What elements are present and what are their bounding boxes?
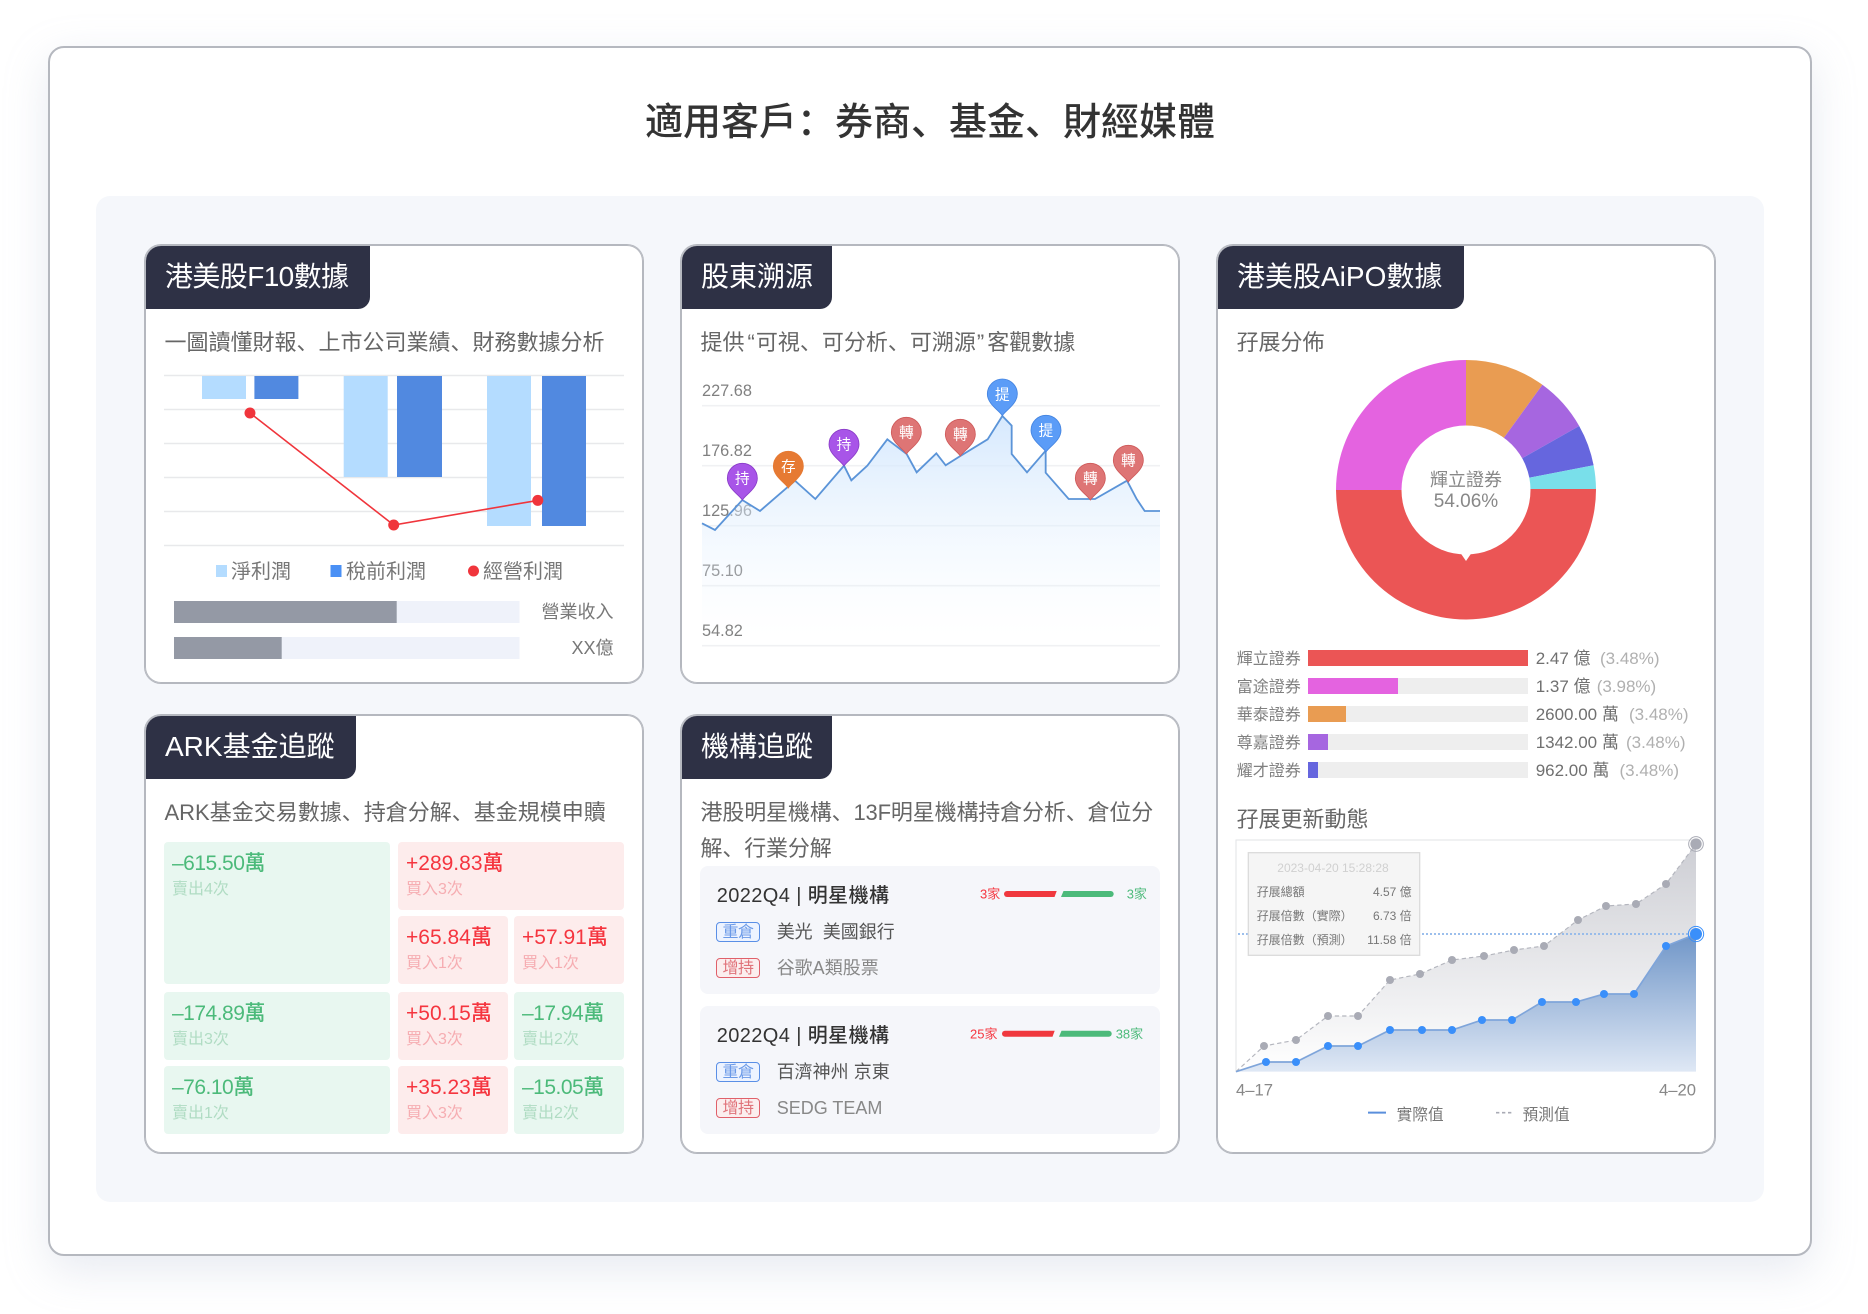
axis labels: 227.68 xyxy=(702,382,752,400)
heading tab xyxy=(146,246,370,309)
cell: 買入3次 xyxy=(406,1031,463,1048)
event pins: 持 xyxy=(735,471,750,488)
event pins: 轉 xyxy=(899,425,914,442)
buy and sell ratio: 3家 xyxy=(1127,886,1147,902)
event pins: 提 xyxy=(1039,423,1054,440)
ranked broker bars: 2.47 億 xyxy=(1536,649,1591,668)
title: 適用客戶：券商、基金、財經媒體 xyxy=(645,102,1215,144)
tag: increase xyxy=(716,1098,760,1118)
cell: 賣出3次 xyxy=(172,1031,229,1048)
event pins: 轉 xyxy=(1083,471,1098,488)
axis labels xyxy=(1236,1081,1696,1100)
heading tab xyxy=(146,716,356,779)
event pins: 存 xyxy=(781,459,796,476)
price line xyxy=(702,416,1160,530)
holdings: 美光 美國銀行 xyxy=(777,922,895,942)
legend: 稅前利潤 xyxy=(346,560,426,583)
background panel xyxy=(96,196,1764,1202)
axis labels xyxy=(702,382,752,640)
ranked broker bars: 962.00 萬 xyxy=(1536,761,1609,780)
heading tab: 股東溯源 xyxy=(701,261,813,292)
axis labels: 176.82 xyxy=(702,442,752,460)
cell: –174.89萬 xyxy=(172,1002,265,1025)
buy and sell ratio: 38家 xyxy=(1116,1026,1143,1042)
tag: increase: 增持 xyxy=(722,1100,754,1117)
cell: –76.10萬 xyxy=(172,1076,254,1099)
ranked broker bars: 尊嘉證券 xyxy=(1237,734,1301,752)
forecast line xyxy=(1236,837,1703,1072)
institution card 1 xyxy=(700,866,1160,994)
cell: +289.83萬 xyxy=(406,852,504,875)
bar and line chart xyxy=(164,374,624,659)
area chart xyxy=(1236,836,1704,1124)
event pins: 轉 xyxy=(953,427,968,444)
tooltip: 11.58 倍 xyxy=(1367,932,1412,947)
forecast area xyxy=(1236,844,1696,1072)
axis labels: 125.96 xyxy=(702,502,752,520)
revenue progress bars xyxy=(174,601,614,659)
ranked broker bars: (3.48%) xyxy=(1629,705,1689,724)
treemap xyxy=(164,842,624,1134)
heading tab: ARK基金追蹤 xyxy=(165,731,335,762)
legend: 經營利潤 xyxy=(483,560,563,583)
donut centre label: 輝立證券 xyxy=(1430,470,1502,490)
buy and sell ratio xyxy=(970,1026,1143,1042)
revenue progress bars: 營業收入 xyxy=(542,602,614,622)
buy and sell ratio: 25家 xyxy=(970,1026,997,1042)
legend xyxy=(216,560,563,583)
cell: +65.84萬 xyxy=(406,926,492,949)
cell: –615.50萬 xyxy=(172,852,265,875)
description: ARK基金交易數據、持倉分解、基金規模申贖 xyxy=(164,800,606,825)
heading tab: 機構追蹤 xyxy=(701,731,813,762)
event pins xyxy=(727,379,1143,500)
heading tab xyxy=(682,716,832,779)
cell: 賣出2次 xyxy=(522,1031,579,1048)
tooltip: 4.57 億 xyxy=(1373,885,1412,899)
cell: 賣出4次 xyxy=(172,881,229,898)
line chart with event pins xyxy=(702,378,1160,646)
ranked broker bars: 耀才證券 xyxy=(1237,762,1301,780)
actual line xyxy=(1236,926,1704,1072)
ranked broker bars: 輝立證券 xyxy=(1237,650,1301,668)
cell xyxy=(398,992,508,1060)
tooltip: 6.73 倍 xyxy=(1373,908,1412,923)
net profit bars xyxy=(202,376,531,526)
event pins: 提 xyxy=(995,386,1010,403)
panel: 港美股AiPO數據 xyxy=(1217,245,1715,1153)
panel: 機構追蹤 xyxy=(681,715,1179,1153)
panel: 港美股F10數據 xyxy=(145,245,643,683)
tooltip: 孖展倍數（預測） xyxy=(1257,932,1353,947)
price area xyxy=(702,416,1160,647)
cell: 賣出1次 xyxy=(172,1105,229,1122)
cell xyxy=(514,1066,624,1134)
heading tab: 港美股AiPO數據 xyxy=(1237,261,1442,292)
actual area xyxy=(1236,934,1696,1072)
tooltip: 孖展倍數（實際） xyxy=(1257,908,1353,923)
buy and sell ratio: 3家 xyxy=(980,886,1000,902)
heading tab xyxy=(682,246,832,309)
axis labels: 54.82 xyxy=(702,622,743,640)
card title: 2022Q4 | 明星機構 xyxy=(717,885,889,907)
cell xyxy=(398,1066,508,1134)
cell: +57.91萬 xyxy=(522,926,608,949)
tooltip: 孖展總額 xyxy=(1257,884,1305,899)
ranked broker bars: 1342.00 萬 xyxy=(1536,733,1619,752)
ranked broker bars: (3.98%) xyxy=(1597,677,1656,696)
crosshair xyxy=(1238,932,1696,936)
chart legend xyxy=(1368,1105,1570,1124)
cell xyxy=(398,842,624,910)
chart legend: 實際值 xyxy=(1397,1105,1444,1124)
holdings: 百濟神州 京東 xyxy=(777,1062,890,1082)
cell xyxy=(164,992,390,1060)
operating profit line xyxy=(244,408,543,530)
description: 一圖讀懂財報、上市公司業績、財務數據分析 xyxy=(164,330,605,355)
heading tab xyxy=(1218,246,1464,309)
ranked broker bars: (3.48%) xyxy=(1600,649,1660,668)
cell xyxy=(164,1066,390,1134)
cell xyxy=(514,916,624,984)
cell xyxy=(398,916,508,984)
cell: +35.23萬 xyxy=(406,1076,492,1099)
axis labels: 75.10 xyxy=(702,562,743,580)
cell: 買入3次 xyxy=(406,881,463,898)
panel: 股東溯源 xyxy=(681,245,1179,683)
heading tab: 港美股F10數據 xyxy=(165,261,348,292)
axis labels: 4–17 xyxy=(1236,1081,1273,1100)
donut centre label xyxy=(1430,470,1502,512)
holdings: 谷歌A類股票 xyxy=(777,958,879,978)
tag: heavy: 重倉 xyxy=(722,1064,754,1081)
event pins: 轉 xyxy=(1121,453,1136,470)
cell xyxy=(164,842,390,984)
cell: –15.05萬 xyxy=(522,1076,604,1099)
cell: +50.15萬 xyxy=(406,1002,492,1025)
ranked broker bars: 2600.00 萬 xyxy=(1536,705,1619,724)
event pins: 持 xyxy=(837,437,852,454)
cell: 買入1次 xyxy=(522,955,579,972)
description: 港股明星機構、13F明星機構持倉分析、倉位分解、行業分解 xyxy=(700,800,1153,861)
ranked broker bars: (3.48%) xyxy=(1620,761,1679,780)
legend: 淨利潤 xyxy=(231,560,291,583)
ranked broker bars: 華泰證券 xyxy=(1237,706,1301,724)
pre-tax profit bars xyxy=(254,376,586,526)
description: 提供“可視、可分析、可溯源”客觀數據 xyxy=(700,330,1075,355)
panel: ARK基金追蹤 xyxy=(145,715,643,1153)
holdings: SEDG TEAM xyxy=(777,1098,882,1118)
card title: 2022Q4 | 明星機構 xyxy=(717,1025,889,1047)
institution card 2 xyxy=(700,1006,1160,1134)
buy and sell ratio xyxy=(980,886,1147,902)
section heading: distribution: 孖展分佈 xyxy=(1236,330,1325,355)
ranked broker bars: 富途證券 xyxy=(1237,678,1301,696)
ranked broker bars: 1.37 億 xyxy=(1536,677,1591,696)
cell: –17.94萬 xyxy=(522,1002,604,1025)
donut chart xyxy=(1336,360,1596,620)
ranked broker bars xyxy=(1237,649,1689,780)
tooltip: 2023-04-20 15:28:28 xyxy=(1277,861,1389,875)
tag: heavy: 重倉 xyxy=(722,924,754,941)
tag: increase: 增持 xyxy=(722,960,754,977)
cell: 賣出2次 xyxy=(522,1105,579,1122)
tag: heavy xyxy=(716,922,760,942)
donut centre label: 54.06% xyxy=(1434,491,1498,512)
revenue progress bars: XX億 xyxy=(571,638,614,658)
ranked broker bars: (3.48%) xyxy=(1626,733,1686,752)
tooltip xyxy=(1248,853,1420,955)
chart legend: 預測值 xyxy=(1523,1106,1570,1124)
section heading: updates: 孖展更新動態 xyxy=(1236,807,1369,832)
cell xyxy=(514,992,624,1060)
cell: 買入3次 xyxy=(406,1105,463,1122)
cell: 買入1次 xyxy=(406,955,463,972)
tag: heavy xyxy=(716,1062,760,1082)
axis labels: 4–20 xyxy=(1659,1081,1696,1100)
tag: increase xyxy=(716,958,760,978)
